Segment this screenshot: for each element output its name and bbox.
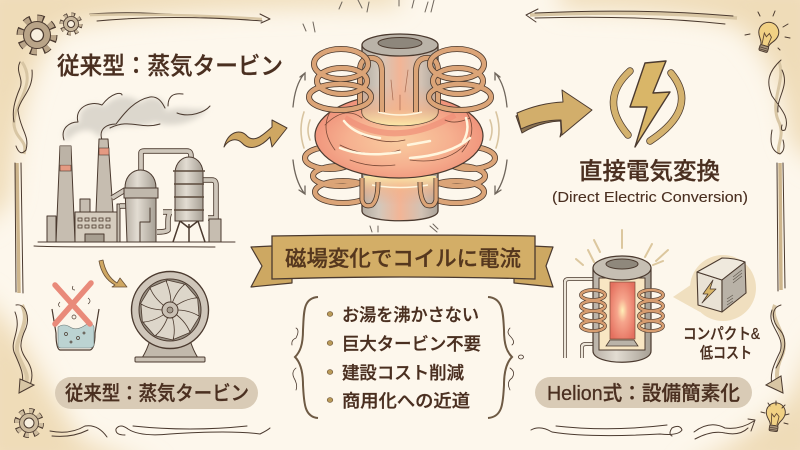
text: direct electric conversion: (Direct Electric Conversion) bbox=[552, 190, 748, 206]
upper front arches bbox=[360, 58, 438, 112]
left scroll bottom bbox=[13, 305, 34, 393]
plasma core bbox=[610, 282, 635, 339]
coils bbox=[581, 290, 663, 331]
bullet texts: お湯を沸かさない bbox=[342, 305, 479, 325]
ground line bbox=[34, 242, 235, 247]
central cylinder lower bbox=[362, 172, 438, 221]
lower rings bbox=[305, 147, 495, 203]
top left arrow line bbox=[90, 13, 270, 23]
tank right bbox=[173, 157, 205, 242]
text: compact and low cost bbox=[683, 325, 761, 362]
vessel bbox=[593, 268, 651, 362]
icon: crossed out boiling water bbox=[52, 283, 99, 350]
brace ornaments bbox=[292, 328, 523, 390]
text: compact and low cost: コンパクト& bbox=[683, 325, 761, 343]
pipes bbox=[112, 151, 216, 232]
bottom left flourishes bbox=[50, 426, 270, 437]
right scroll top bbox=[769, 60, 787, 154]
bullet texts: 建設コスト削減 bbox=[342, 363, 464, 383]
tank left bbox=[124, 170, 158, 242]
smoke bbox=[63, 93, 210, 140]
bottom right flourishes bbox=[531, 419, 755, 439]
left long line bbox=[15, 163, 23, 293]
icon: lightning bolt with arcs bbox=[613, 61, 682, 147]
bottom arches bbox=[362, 178, 436, 206]
bullet texts: 商用化への近道 bbox=[342, 391, 470, 411]
heading: conventional steam turbine: 従来型：蒸気タービン bbox=[57, 53, 283, 80]
icon: steam turbine fan bbox=[132, 272, 208, 362]
right scroll bottom bbox=[766, 305, 785, 393]
illustration: fusion reactor with coils bbox=[293, 0, 507, 232]
small unit bbox=[209, 219, 221, 242]
rays bbox=[576, 230, 668, 265]
plasma torus bbox=[315, 94, 483, 178]
pipes bbox=[565, 279, 593, 358]
left scroll top bbox=[13, 62, 32, 154]
central cylinder upper bbox=[362, 34, 438, 126]
icon: bulb bottom right bbox=[761, 401, 789, 432]
pill: conventional steam turbine: 従来型：蒸気タービン bbox=[65, 382, 249, 405]
left brace bbox=[295, 297, 318, 418]
motion arrows bbox=[293, 0, 507, 232]
bullet texts bbox=[342, 305, 481, 411]
pill: Helion equipment simplification: Helion式：設備簡素化 bbox=[547, 382, 740, 405]
pill: Helion equipment simplification bbox=[535, 377, 752, 408]
factory building bbox=[47, 199, 120, 242]
illustration: Helion compact reactor bbox=[565, 230, 668, 362]
callout: compact box bbox=[673, 255, 756, 321]
chimney left bbox=[56, 146, 75, 242]
icon: bulb top right bbox=[745, 11, 790, 54]
bullet dots bbox=[327, 312, 333, 402]
upper rings bbox=[309, 49, 491, 110]
arrow: factory to reactor bbox=[224, 120, 287, 147]
icon: gears top left bbox=[22, 16, 80, 50]
chimney right bbox=[96, 139, 113, 212]
banner: magnetic change induces coil current bbox=[251, 235, 553, 287]
text: direct electric conversion: 直接電気変換 bbox=[579, 158, 720, 184]
right long line bbox=[777, 163, 785, 291]
banner: magnetic change induces coil current: 磁場変化でコイルに電流 bbox=[285, 247, 521, 271]
icon: curved arrow factory to turbine bbox=[99, 260, 127, 287]
bullet texts: 巨大タービン不要 bbox=[342, 334, 481, 354]
bottom left gear bbox=[18, 412, 40, 434]
arrow: reactor to direct conversion bbox=[516, 90, 592, 137]
text: direct electric conversion bbox=[552, 158, 748, 206]
pill: conventional steam turbine bbox=[55, 377, 258, 409]
panel: benefit list with braces bbox=[292, 297, 523, 418]
right brace bbox=[488, 297, 512, 418]
illustration: steam factory bbox=[34, 93, 235, 247]
text: compact and low cost: 低コスト bbox=[700, 344, 752, 362]
top right arrow line bbox=[526, 9, 737, 24]
